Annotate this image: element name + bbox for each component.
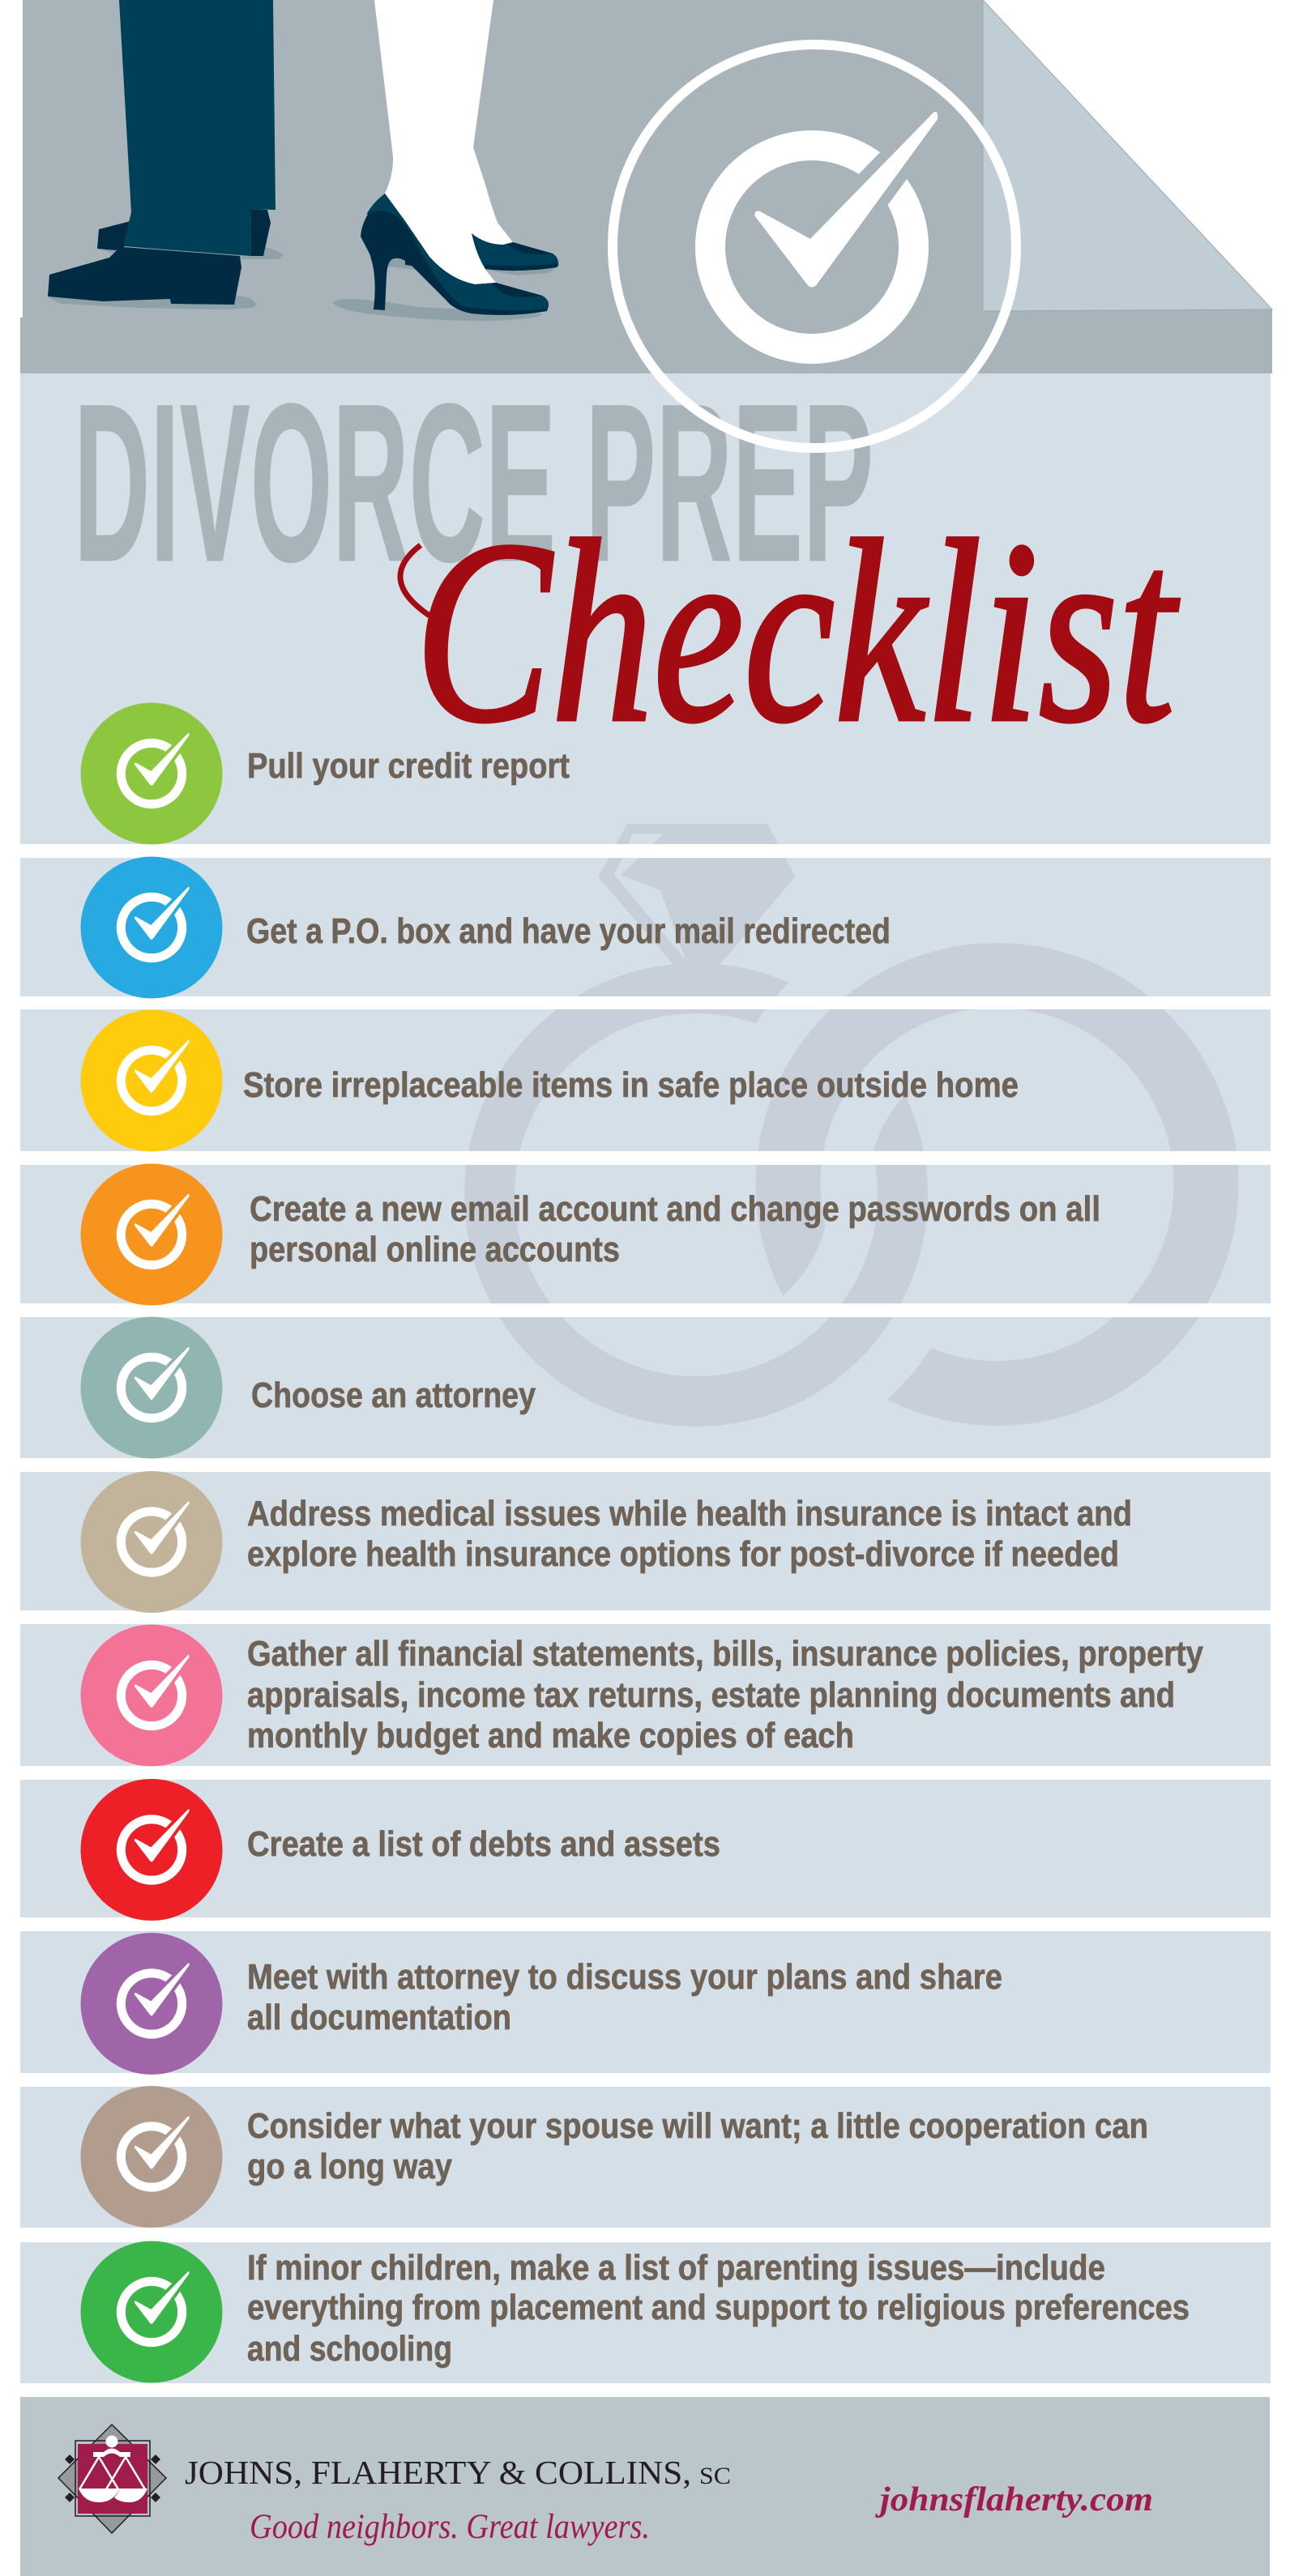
row 2: P.O. box — [81, 857, 891, 998]
icon: folded page corner — [983, 0, 1272, 311]
text: and schooling — [247, 2329, 452, 2369]
icon: pink check — [81, 1625, 222, 1766]
text: Create a list of debts and assets — [247, 1824, 720, 1864]
icon: blue check — [81, 857, 222, 998]
row 4: email account — [81, 1163, 1100, 1306]
text: Get a P.O. box and have your mail redirected — [246, 911, 891, 951]
row 10: spouse — [81, 2086, 1148, 2228]
icon: red check — [81, 1779, 222, 1921]
firm name: JOHNS, FLAHERTY & COLLINS, — [185, 2454, 691, 2491]
rear pump — [472, 233, 558, 271]
watermark: interlocked wedding rings with diamond — [489, 826, 1206, 1401]
text: monthly budget and make copies of each — [247, 1716, 854, 1755]
firm name: SC — [699, 2463, 731, 2489]
icon: tan check — [81, 2086, 222, 2228]
icon: green check — [81, 703, 222, 844]
text: Meet with attorney to discuss your plans and share — [247, 1957, 1002, 1997]
white dividers between rows — [20, 844, 1271, 2242]
text: Choose an attorney — [251, 1375, 536, 1415]
icon: orange check — [81, 1163, 222, 1306]
row 3: irreplaceable items — [81, 1009, 1019, 1152]
logo: scales of justice — [58, 2425, 166, 2533]
row 8: debts and assets — [81, 1779, 720, 1921]
front pump — [361, 194, 549, 315]
text — [247, 1634, 1203, 1755]
website: johnsflaherty.com — [875, 2481, 1153, 2518]
text: appraisals, income tax returns, estate planning documents and — [247, 1675, 1175, 1715]
icon: large check mark in circle — [613, 45, 1016, 448]
icon: green check — [81, 2241, 222, 2383]
row 11: parenting issues — [81, 2241, 1190, 2383]
text: explore health insurance options for post-divorce if needed — [247, 1534, 1119, 1574]
row 6: medical issues — [81, 1471, 1132, 1613]
text: Address medical issues while health insurance is intact and — [247, 1494, 1132, 1533]
text: Consider what your spouse will want; a little cooperation can — [247, 2106, 1148, 2146]
icon: purple check — [81, 1933, 222, 2075]
text: go a long way — [247, 2147, 452, 2186]
text: Store irreplaceable items in safe place outside home — [243, 1065, 1019, 1105]
row 9: meet attorney — [81, 1933, 1002, 2075]
text: all documentation — [247, 1998, 511, 2037]
icon: yellow check — [81, 1009, 222, 1152]
icon: beige check — [81, 1471, 222, 1613]
text — [247, 2248, 1190, 2369]
text — [250, 1189, 1100, 1269]
row 5: attorney — [81, 1317, 536, 1458]
illustration: man's and woman's legs — [48, 0, 558, 321]
text — [247, 1957, 1002, 2037]
text — [247, 1494, 1132, 1574]
row 7: financial statements — [81, 1625, 1203, 1766]
text: Create a new email account and change passwords on all — [250, 1189, 1100, 1229]
woman's legs — [374, 0, 513, 284]
row 1: credit report — [81, 703, 570, 844]
icon: teal check — [81, 1317, 222, 1458]
text — [247, 2106, 1148, 2186]
header panel: grey top with folded corner — [20, 0, 1272, 373]
panel: footer — [20, 2397, 1270, 2576]
panel: checklist background — [20, 373, 1271, 2383]
text: If minor children, make a list of parenting issues—include — [247, 2248, 1105, 2288]
text: Pull your credit report — [247, 746, 570, 786]
tagline: Good neighbors. Great lawyers. — [250, 2508, 650, 2546]
text: personal online accounts — [250, 1230, 620, 1269]
